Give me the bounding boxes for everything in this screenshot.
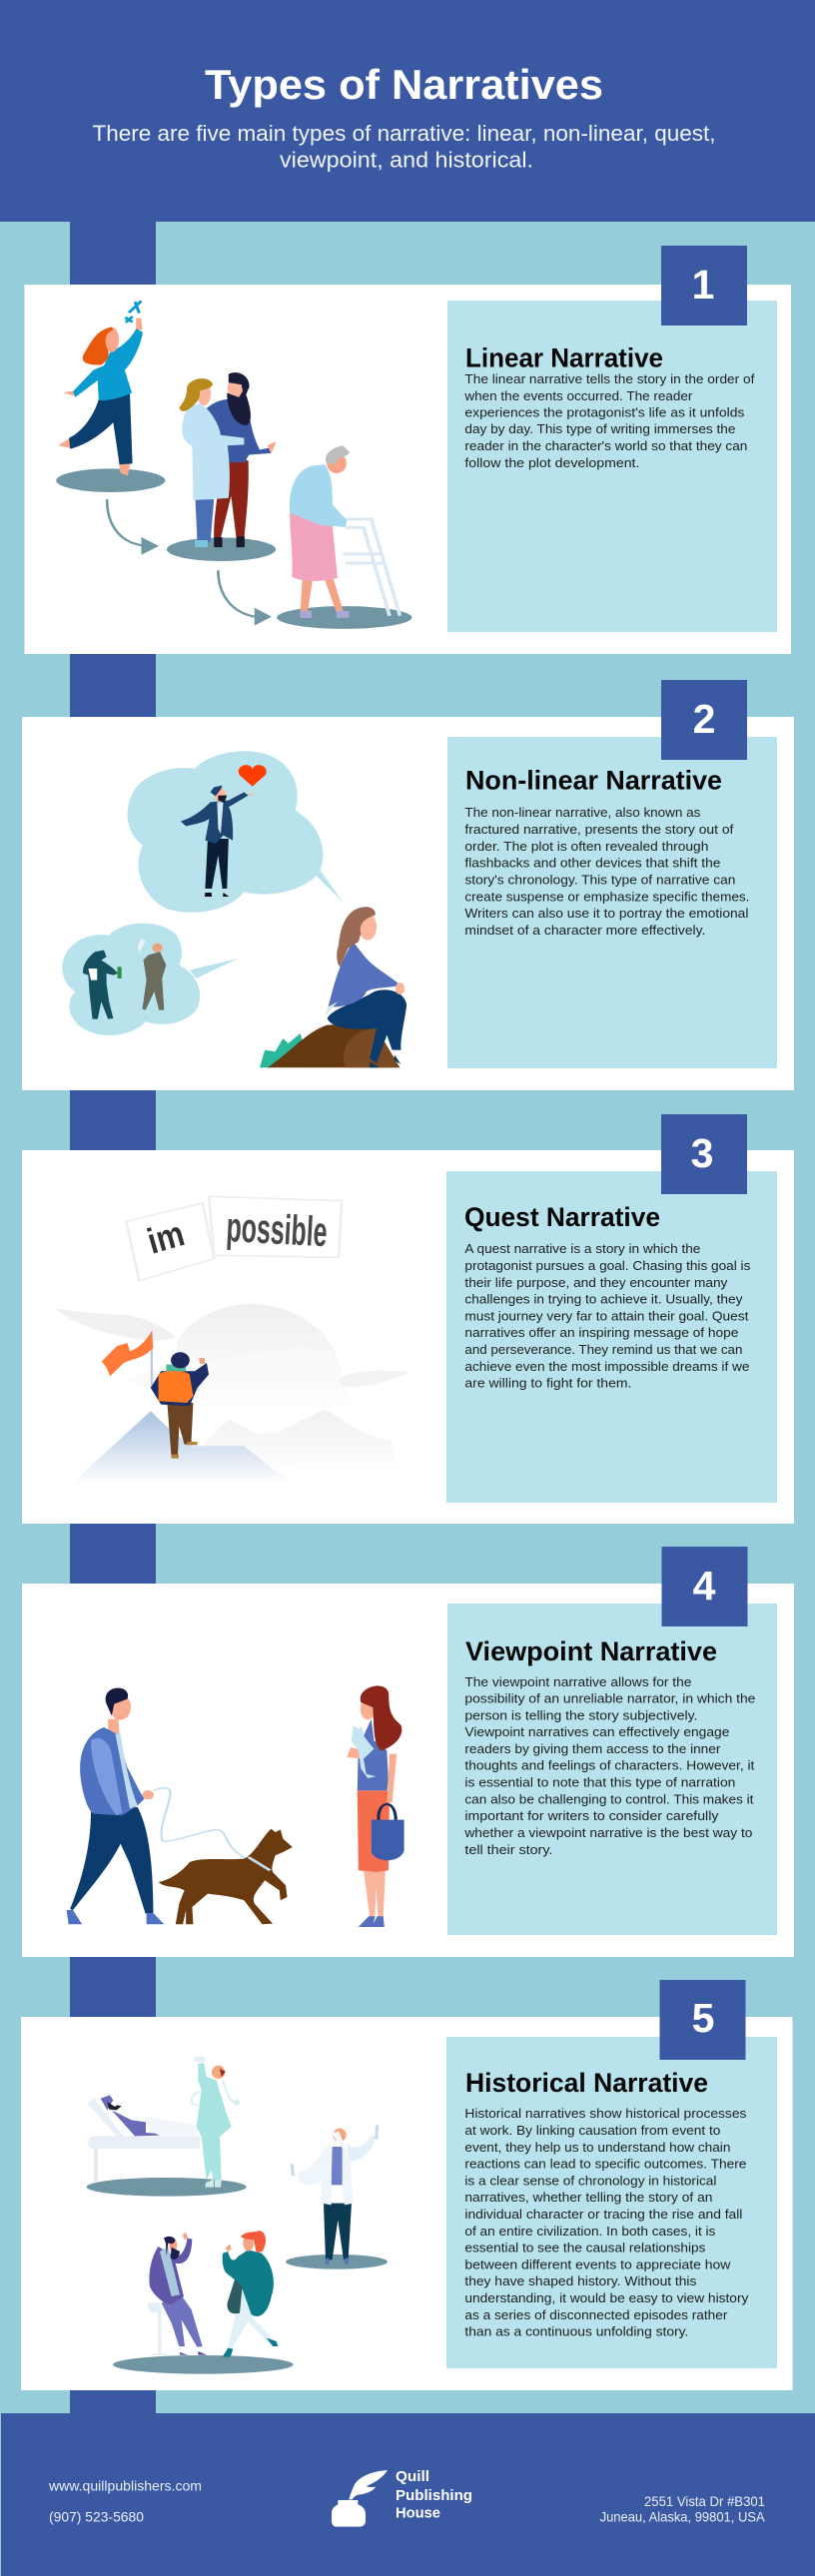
- body text: reader in the character's world so that they can: [464, 438, 747, 453]
- figure: woman sitting on rock: [260, 907, 407, 1067]
- body text: experiences the protagonist's life as it unfolds: [464, 405, 745, 420]
- scenery: clouds, sun and mountains: [55, 1304, 410, 1498]
- body text: understanding, it would be easy to view history: [464, 2290, 749, 2305]
- number badge: [661, 1547, 747, 1626]
- thought bubble: small: [62, 924, 238, 1035]
- text box: [446, 1114, 777, 1503]
- body text: possibility of an unreliable narrator, in which the: [464, 1691, 755, 1706]
- illustration: life stages with arrows: [56, 301, 411, 629]
- text box: [446, 1980, 777, 2368]
- body text: are willing to fight for them.: [464, 1376, 631, 1390]
- arrow: second step: [218, 570, 272, 625]
- brand name: Quill: [396, 2468, 429, 2485]
- contact details: [48, 2478, 202, 2524]
- heading: Linear Narrative: [465, 343, 663, 373]
- body text: they have shaped history. Without this: [464, 2273, 697, 2288]
- body text: Historical narratives show historical processes: [464, 2106, 747, 2121]
- body text: fractured narrative, presents the story out of: [464, 822, 734, 837]
- body text: narratives, whether telling the story of an: [464, 2190, 712, 2205]
- arrow: first step: [107, 499, 159, 555]
- heading: Historical Narrative: [465, 2068, 708, 2098]
- body text: event, they help us to understand how chain: [464, 2140, 730, 2155]
- body text: and perseverance. They remind us that we can: [464, 1342, 742, 1357]
- panel: viewpoint narrative: [22, 1547, 794, 1957]
- number badge: [661, 1114, 747, 1194]
- body text: of an entire civilization. In both cases, it is: [464, 2224, 716, 2239]
- illustration: thought bubbles and sitting woman: [62, 751, 407, 1067]
- contact details: (907) 523-5680: [49, 2508, 144, 2524]
- number badge: [661, 680, 747, 760]
- body text: individual character or tracing the rise and fall: [464, 2207, 743, 2222]
- note: possible: [209, 1196, 342, 1257]
- body text: [464, 1241, 751, 1390]
- figure: scientist with test tubes: [291, 2125, 379, 2263]
- body text: reactions can lead to specific outcomes. There: [464, 2157, 746, 2171]
- number badge: [661, 246, 747, 325]
- body text: readers by giving them access to the inner: [464, 1741, 721, 1756]
- number badge: 3: [691, 1130, 713, 1176]
- body text: challenges in trying to achieve it. Usually, they: [464, 1292, 743, 1306]
- body text: tell their story.: [464, 1842, 552, 1857]
- address: 2551 Vista Dr #B301: [644, 2493, 765, 2509]
- body text: follow the plot development.: [464, 455, 639, 470]
- body text: flashbacks and other devices that shift the: [464, 855, 720, 871]
- note: im: [126, 1203, 214, 1281]
- body text: as a series of disconnected episodes rather: [464, 2307, 728, 2322]
- header banner: [0, 0, 815, 222]
- body text: person is telling the story subjectively.: [464, 1707, 697, 1723]
- brand name: Publishing: [396, 2487, 472, 2504]
- body text: is a clear sense of chronology in historical: [464, 2173, 717, 2188]
- body text: at work. By linking causation from event to: [464, 2123, 720, 2138]
- body text: than as a continuous unfolding story.: [464, 2324, 688, 2339]
- figure: patient on bed with doctor: [87, 2057, 240, 2188]
- subtitle: viewpoint, and historical.: [280, 148, 533, 172]
- number badge: 4: [693, 1563, 716, 1609]
- text box: [447, 680, 777, 1068]
- body text: between different events to appreciate how: [464, 2256, 731, 2272]
- body text: [464, 805, 749, 938]
- icon: heart: [239, 765, 267, 787]
- heading: Viewpoint Narrative: [465, 1636, 717, 1666]
- subtitle: [92, 121, 715, 172]
- body text: when the events occurred. The reader: [463, 388, 693, 403]
- leash: [153, 1788, 247, 1859]
- body text: The viewpoint narrative allows for the: [464, 1674, 691, 1689]
- panel: non-linear narrative: [22, 680, 794, 1090]
- brand name: House: [396, 2504, 440, 2522]
- body text: A quest narrative is a story in which the: [464, 1241, 700, 1256]
- body text: Viewpoint narratives can effectively engage: [464, 1724, 729, 1739]
- connector strip: [70, 222, 156, 2413]
- body text: The linear narrative tells the story in the order of: [464, 371, 755, 386]
- body text: Writers can also use it to portray the emotional: [464, 906, 749, 921]
- panel: linear narrative: [24, 246, 791, 654]
- body text: [463, 371, 755, 470]
- thought bubble: large: [128, 751, 343, 913]
- body text: protagonist pursues a goal. Chasing this goal is: [464, 1258, 751, 1273]
- panel: quest narrative: [22, 1114, 794, 1524]
- text box: [447, 246, 777, 632]
- number badge: [659, 1980, 745, 2060]
- text box: [447, 1547, 777, 1935]
- body text: The non-linear narrative, also known as: [464, 805, 701, 820]
- body text: mindset of a character more effectively.: [464, 923, 705, 938]
- body text: thoughts and feelings of characters. However, it: [464, 1758, 755, 1773]
- body text: essential to see the causal relationships: [464, 2241, 706, 2254]
- number badge: 2: [693, 696, 715, 742]
- illustration: climber and impossible notes: [55, 1196, 410, 1498]
- footer: [1, 2413, 815, 2576]
- brand name: [396, 2468, 472, 2522]
- figure: climber with flag: [102, 1331, 209, 1459]
- word: possible: possible: [226, 1203, 329, 1255]
- address: [600, 2493, 765, 2524]
- panel: historical narrative: [21, 1980, 793, 2390]
- heading: Quest Narrative: [464, 1202, 660, 1232]
- body text: story's chronology. This type of narrative can: [464, 873, 735, 887]
- figure: woman with cat and bag: [347, 1685, 405, 1927]
- body text: can also be challenging to control. This makes it: [464, 1791, 754, 1806]
- contact details: www.quillpublishers.com: [48, 2478, 202, 2494]
- body text: must journey very far to attain their goal. Quest: [464, 1308, 749, 1323]
- figure: elderly woman with walker: [290, 445, 400, 618]
- figure: seated man talking: [147, 2233, 207, 2355]
- figure: man: [67, 1688, 164, 1924]
- body text: achieve even the most impossible dreams if we: [464, 1359, 749, 1374]
- heading: Non-linear Narrative: [465, 766, 722, 796]
- illustration: doctors and patients: [87, 2057, 388, 2374]
- number badge: 5: [692, 1995, 714, 2041]
- body text: whether a viewpoint narrative is the best way to: [463, 1825, 752, 1840]
- word: im: im: [143, 1212, 189, 1262]
- illustration: man walking dog and woman with cat: [67, 1685, 405, 1927]
- figure: woman with red hair: [223, 2231, 278, 2357]
- body text: is essential to note that this type of narration: [464, 1775, 735, 1789]
- body text: their life purpose, and they encounter many: [464, 1275, 728, 1290]
- body text: important for writers to consider carefully: [464, 1808, 719, 1823]
- figure: young girl: [58, 301, 143, 476]
- figure: couple: [179, 372, 277, 547]
- figure: dog: [159, 1829, 293, 1924]
- number badge: 1: [692, 262, 714, 308]
- subtitle: There are five main types of narrative: linear, non-linear, quest,: [92, 121, 715, 146]
- body text: narratives offer an inspiring message of hope: [464, 1325, 738, 1340]
- body text: order. The plot is often revealed through: [464, 839, 708, 854]
- body text: [464, 2106, 749, 2339]
- title: Types of Narratives: [205, 61, 603, 108]
- body text: day by day. This type of writing immerses the: [464, 421, 735, 436]
- logo: inkwell and quill: [332, 2470, 388, 2527]
- address: Juneau, Alaska, 99801, USA: [600, 2508, 765, 2524]
- body text: create suspense or emphasize specific themes.: [464, 889, 749, 904]
- body text: [463, 1674, 755, 1857]
